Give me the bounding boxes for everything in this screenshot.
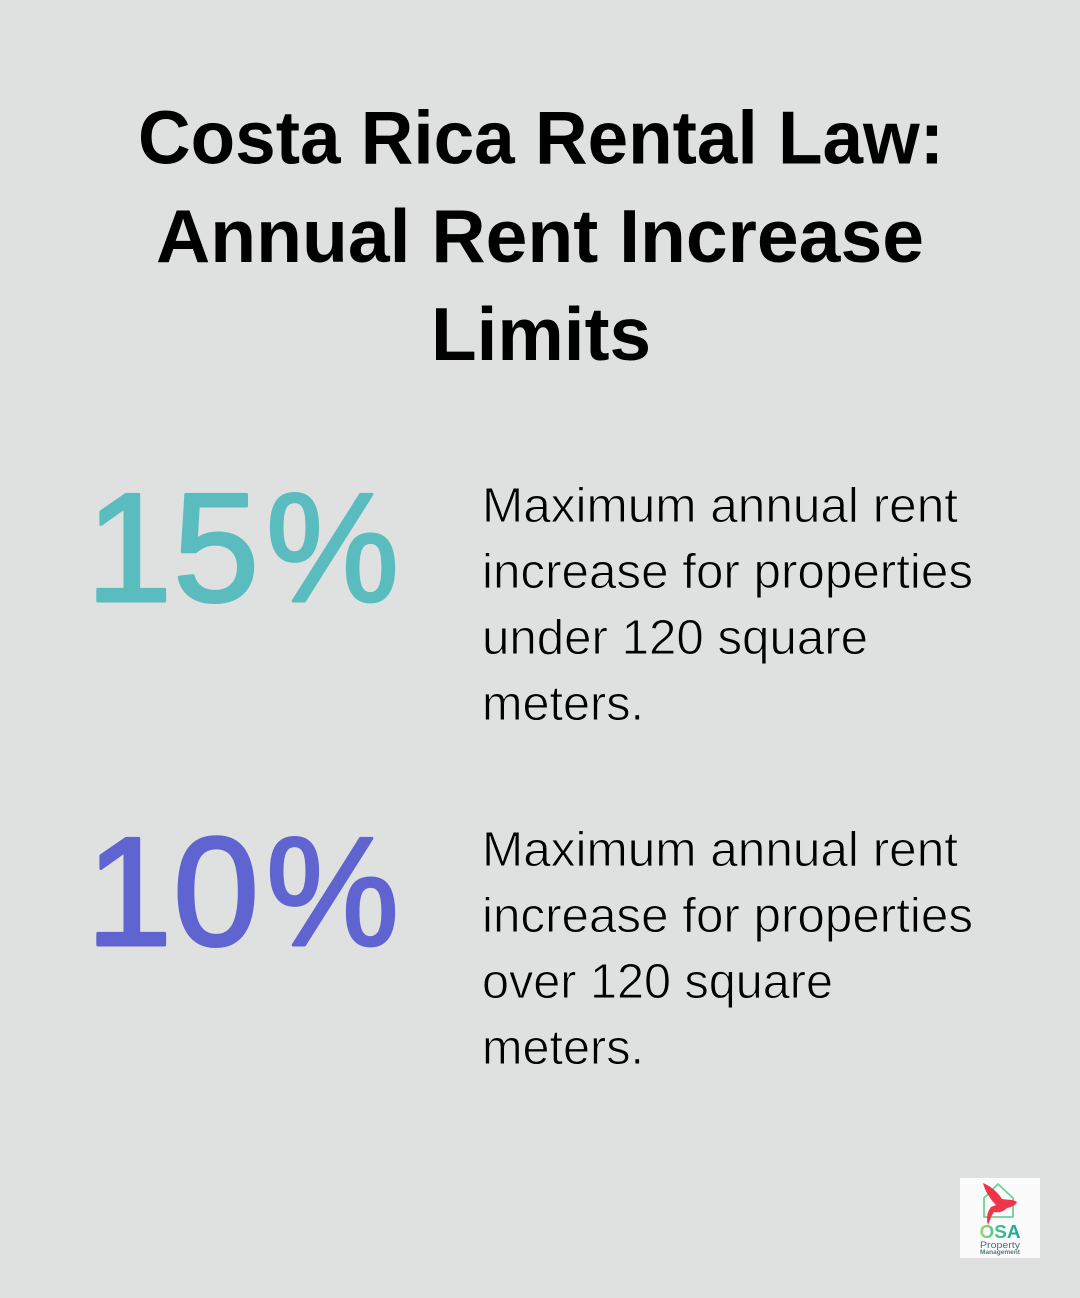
description: properties over 120 square meters [482, 823, 973, 1075]
title: Costa Rica Rental Law: [138, 96, 944, 180]
description: properties over 120 square meters: over 120 square [482, 955, 833, 1009]
logo: OSA Property Management: Property [980, 1240, 1020, 1251]
stat: 10% [86, 805, 399, 978]
description: properties under 120 square meters: under 120 square [482, 611, 868, 665]
stat: 15%: 5 [173, 461, 259, 634]
stat: 15% [86, 461, 399, 634]
stat: 15%: % [266, 461, 399, 634]
stat: 10%: 1 [86, 805, 172, 978]
description: properties under 120 square meters: increase for properties [482, 545, 973, 599]
icon: house outline [984, 1184, 1013, 1217]
stat: 10%: 0 [173, 805, 259, 978]
title: Annual Rent Increase [156, 194, 924, 278]
icon: red bird [983, 1183, 1017, 1225]
description: properties under 120 square meters [482, 479, 973, 731]
stat: 15%: 1 [86, 461, 172, 634]
description: properties over 120 square meters: increase for properties [482, 889, 973, 943]
logo wordmark: OSA [980, 1222, 1020, 1242]
description: properties over 120 square meters: meters. [482, 1021, 644, 1075]
title: Limits [431, 292, 651, 376]
logo: OSA Property Management [960, 1178, 1040, 1258]
description: properties under 120 square meters: Maximum annual rent [482, 479, 958, 533]
stat: 10%: % [266, 805, 399, 978]
description: properties under 120 square meters: meters. [482, 677, 644, 731]
description: properties over 120 square meters: Maximum annual rent [482, 823, 958, 877]
title [138, 96, 944, 376]
logo: OSA Property Management: Management [980, 1250, 1020, 1256]
